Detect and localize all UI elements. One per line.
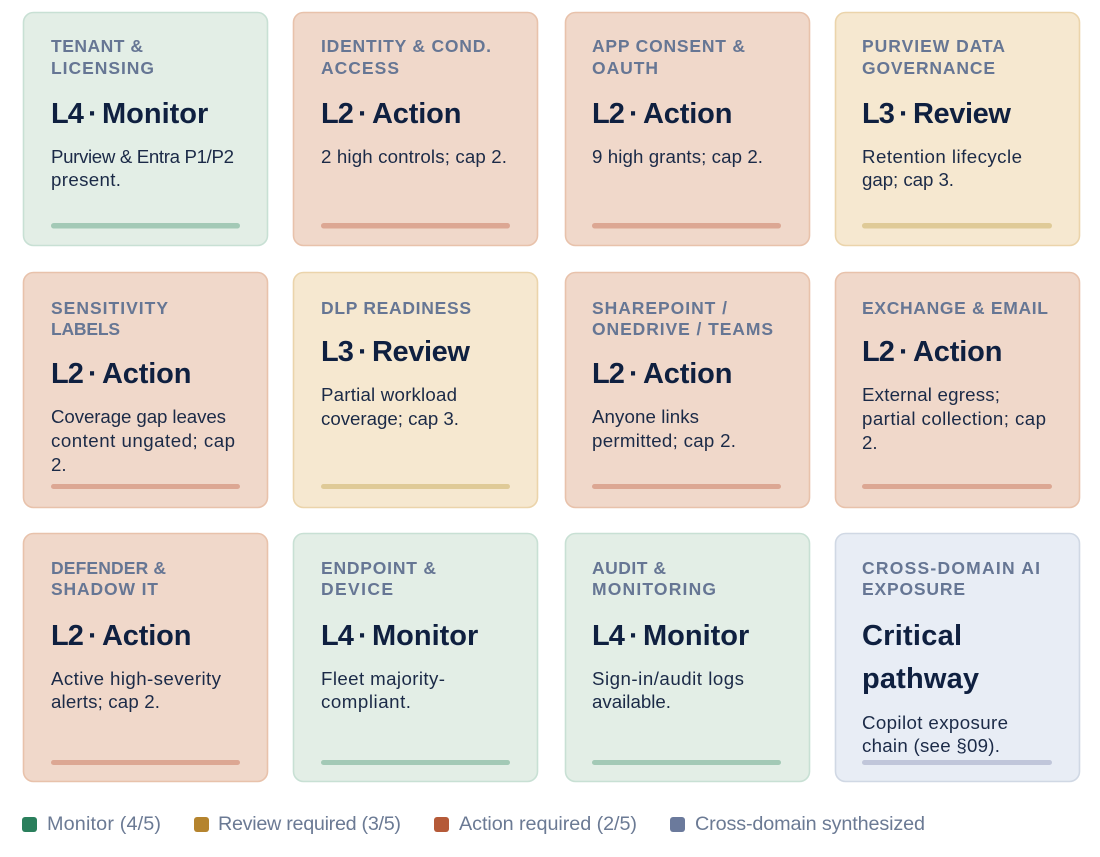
panel: Cross-domain AI Exposure: Critical: [862, 620, 962, 652]
panel: Sensitivity Labels: L2: [51, 358, 83, 390]
panel: Endpoint & Device: DEVICE: [321, 579, 393, 599]
panel: Audit & Monitoring: [566, 534, 810, 782]
panel: Tenant & Licensing: Monitor: [102, 98, 208, 130]
panel: Purview Data Governance: ·: [891, 98, 917, 130]
panel: Defender & Shadow IT: alerts; cap 2.: [51, 691, 160, 712]
panel: DLP Readiness: DLP READINESS: [321, 298, 471, 318]
panel: App Consent & OAuth: 9 high grants; cap 2.: [592, 146, 763, 167]
panel: Sensitivity Labels: LABELS: [51, 319, 120, 339]
panel: Defender & Shadow IT: L2: [51, 620, 83, 652]
panel: Endpoint & Device: ENDPOINT &: [321, 558, 436, 578]
panel: Endpoint & Device: Fleet majority-: [321, 668, 445, 689]
panel: Audit & Monitoring: ·: [621, 620, 647, 652]
panel: Tenant & Licensing: TENANT &: [51, 36, 143, 56]
panel: Purview Data Governance: Review: [913, 98, 1011, 130]
panel: Cross-domain AI Exposure: [836, 534, 1080, 782]
panel: DLP Readiness: coverage; cap 3.: [321, 408, 459, 429]
panel: Tenant & Licensing: ·: [80, 98, 106, 130]
panel: Defender & Shadow IT: Action: [102, 620, 191, 652]
panel: SharePoint / OneDrive / Teams: permitted; cap 2.: [592, 430, 736, 451]
panel: Sensitivity Labels: 2.: [51, 454, 67, 475]
panel: Defender & Shadow IT: [24, 534, 268, 782]
panel: Purview Data Governance: Retention lifecycle: [862, 146, 1022, 167]
panel: Exchange & Email: L2: [862, 336, 894, 368]
panel: Purview Data Governance: [836, 12, 1080, 246]
panel: Cross-domain AI Exposure: CROSS-DOMAIN AI: [862, 558, 1040, 578]
panel: Identity & Cond. Access: 2 high controls; cap 2.: [321, 146, 507, 167]
panel: Identity & Cond. Access: ·: [350, 98, 376, 130]
panel: App Consent & OAuth: [566, 12, 810, 246]
panel: DLP Readiness: ·: [350, 336, 376, 368]
panel: App Consent & OAuth: Action: [643, 98, 732, 130]
panel: Audit & Monitoring: available.: [592, 691, 671, 712]
panel: Endpoint & Device: compliant.: [321, 691, 411, 712]
panel: Tenant & Licensing: L4: [51, 98, 84, 130]
panel: Cross-domain AI Exposure: pathway: [862, 663, 979, 695]
panel: Sensitivity Labels: Coverage gap leaves: [51, 406, 226, 427]
panel: SharePoint / OneDrive / Teams: ·: [621, 358, 647, 390]
panel: Sensitivity Labels: SENSITIVITY: [51, 298, 168, 318]
panel: Audit & Monitoring: MONITORING: [592, 579, 716, 599]
panel: Cross-domain AI Exposure: chain (see §09).: [862, 735, 1000, 756]
panel: Exchange & Email: partial collection; cap: [862, 408, 1046, 429]
panel: Identity & Cond. Access: ACCESS: [321, 58, 399, 78]
panel: Exchange & Email: [836, 272, 1080, 508]
panel: Cross-domain AI Exposure: EXPOSURE: [862, 579, 965, 599]
legend: [22, 813, 925, 835]
panel: Exchange & Email: Action: [913, 336, 1002, 368]
panel: Sensitivity Labels: [24, 272, 268, 508]
panel: Cross-domain AI Exposure: Copilot exposure: [862, 712, 1008, 733]
legend item: Monitor: Monitor (4/5): [47, 813, 161, 835]
panel: SharePoint / OneDrive / Teams: L2: [592, 358, 624, 390]
panel: Endpoint & Device: Monitor: [372, 620, 478, 652]
panel: Audit & Monitoring: Monitor: [643, 620, 749, 652]
panel: Exchange & Email: ·: [891, 336, 917, 368]
panel: DLP Readiness: Partial workload: [321, 384, 457, 405]
panel: SharePoint / OneDrive / Teams: Action: [643, 358, 732, 390]
legend item: Cross-domain synthesized: Cross-domain synthesized: [695, 813, 925, 835]
legend item: Review required: Review required (3/5): [218, 813, 401, 835]
panel: DLP Readiness: [294, 272, 538, 508]
panel: Exchange & Email: 2.: [862, 432, 878, 453]
panel: Tenant & Licensing: present.: [51, 169, 121, 190]
panel: Endpoint & Device: L4: [321, 620, 354, 652]
panel: Tenant & Licensing: LICENSING: [51, 58, 154, 78]
panel: Sensitivity Labels: ·: [80, 358, 106, 390]
panel: DLP Readiness: L3: [321, 336, 354, 368]
panel: Purview Data Governance: L3: [862, 98, 895, 130]
panel: Endpoint & Device: ·: [350, 620, 376, 652]
panel: Tenant & Licensing: Purview & Entra P1/P2: [51, 146, 234, 167]
panel: Identity & Cond. Access: [294, 12, 538, 246]
panel: SharePoint / OneDrive / Teams: [566, 272, 810, 508]
panel: Identity & Cond. Access: L2: [321, 98, 353, 130]
panel: Sensitivity Labels: Action: [102, 358, 191, 390]
panel: Tenant & Licensing: [24, 12, 268, 246]
panel: DLP Readiness: Review: [372, 336, 470, 368]
panel: Identity & Cond. Access: Action: [372, 98, 461, 130]
panel: Purview Data Governance: PURVIEW DATA: [862, 36, 1005, 56]
panel: App Consent & OAuth: OAUTH: [592, 58, 658, 78]
panel: Identity & Cond. Access: IDENTITY & COND.: [321, 36, 491, 56]
panel: Exchange & Email: External egress;: [862, 384, 1000, 405]
panel: Defender & Shadow IT: DEFENDER &: [51, 558, 166, 578]
legend item: Action required: Action required (2/5): [459, 813, 637, 835]
panel: App Consent & OAuth: L2: [592, 98, 624, 130]
panel: Purview Data Governance: GOVERNANCE: [862, 58, 995, 78]
panel: SharePoint / OneDrive / Teams: ONEDRIVE / TEAMS: [592, 319, 773, 339]
panel: Endpoint & Device: [294, 534, 538, 782]
panel: SharePoint / OneDrive / Teams: SHAREPOINT /: [592, 298, 727, 318]
panel: App Consent & OAuth: APP CONSENT &: [592, 36, 745, 56]
panel: Defender & Shadow IT: ·: [80, 620, 106, 652]
panel: Defender & Shadow IT: SHADOW IT: [51, 579, 158, 599]
panel: SharePoint / OneDrive / Teams: Anyone links: [592, 406, 699, 427]
panel: Audit & Monitoring: Sign-in/audit logs: [592, 668, 744, 689]
panel: Sensitivity Labels: content ungated; cap: [51, 430, 235, 451]
panel: Audit & Monitoring: AUDIT &: [592, 558, 666, 578]
panel: Exchange & Email: EXCHANGE & EMAIL: [862, 298, 1048, 318]
panel: Audit & Monitoring: L4: [592, 620, 625, 652]
panel: Purview Data Governance: gap; cap 3.: [862, 169, 954, 190]
panel: App Consent & OAuth: ·: [621, 98, 647, 130]
panel: Defender & Shadow IT: Active high-severity: [51, 668, 222, 689]
